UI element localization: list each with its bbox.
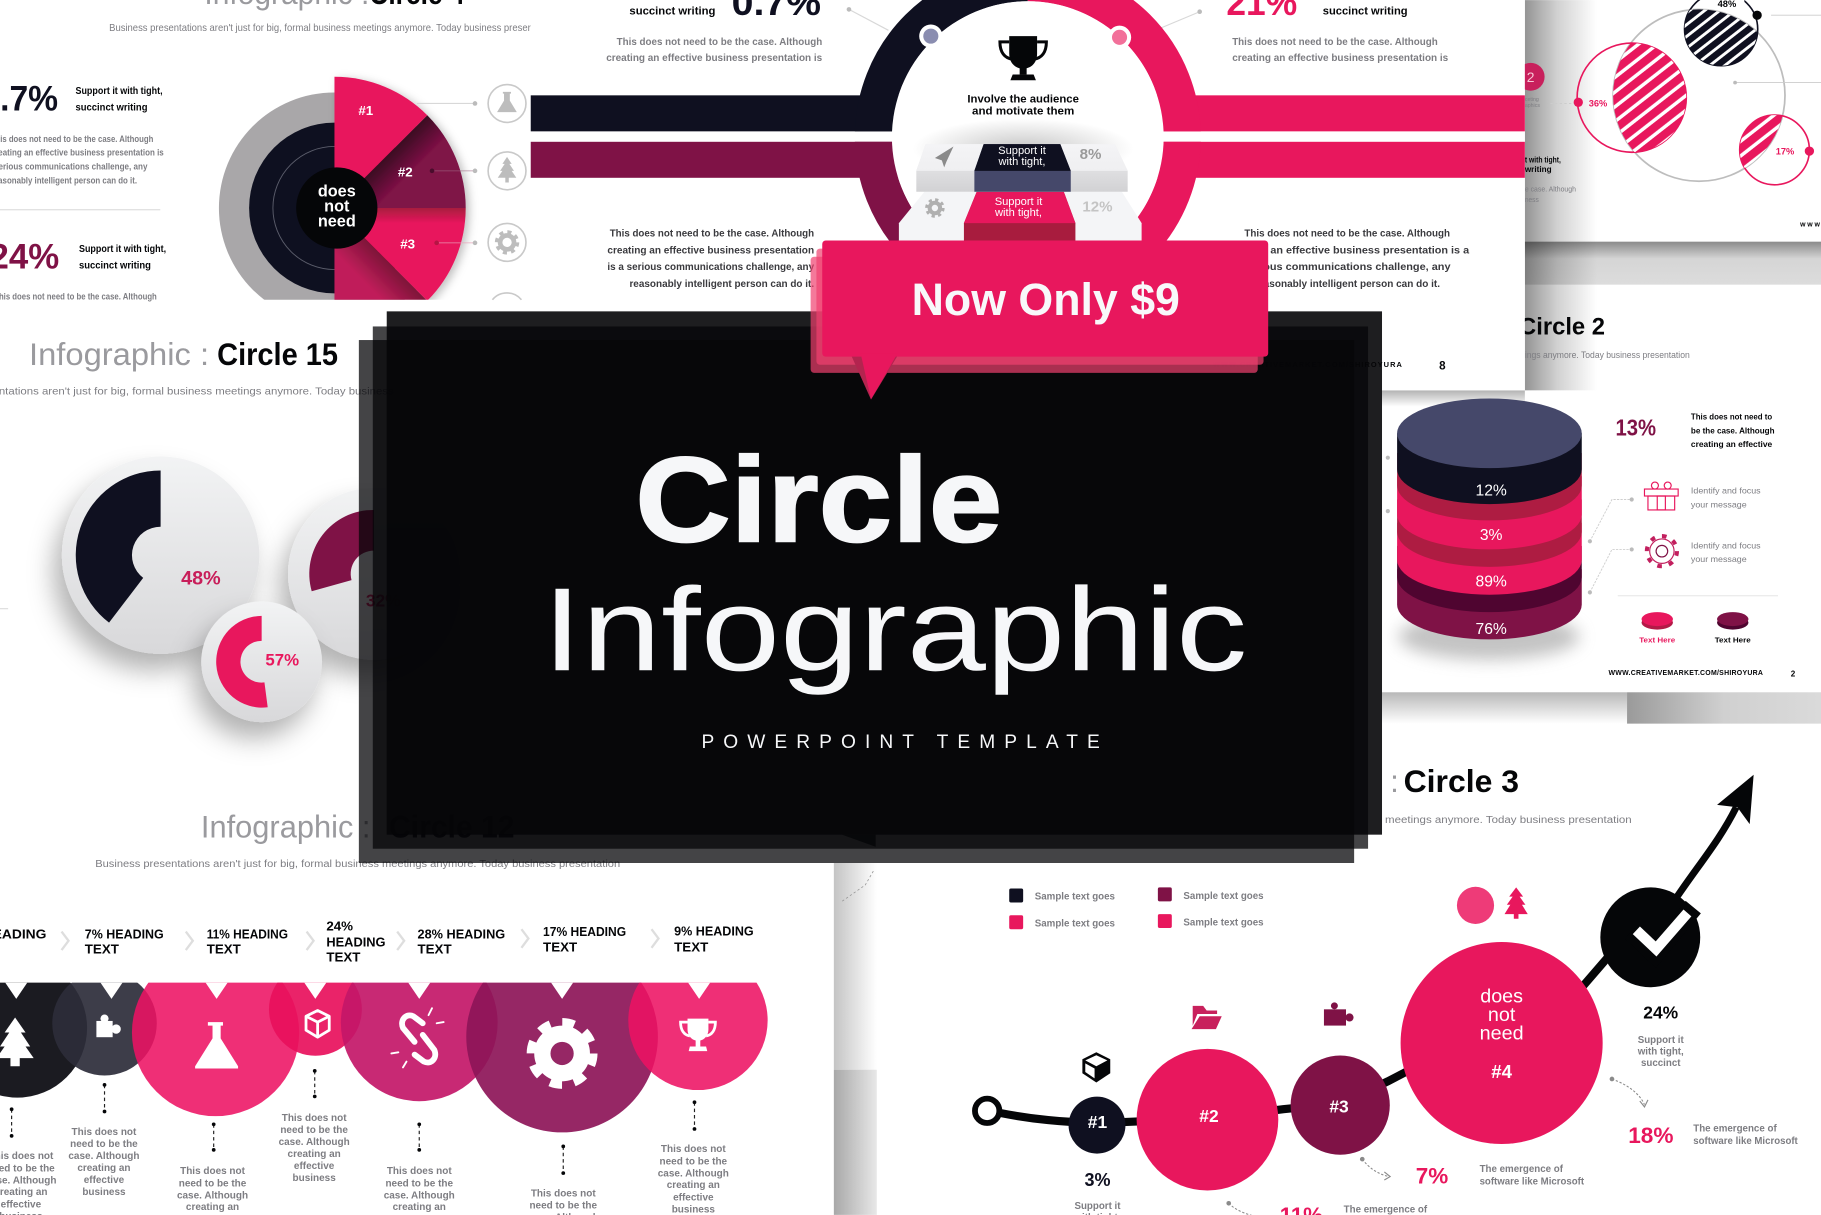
stat block 24% bbox=[0, 237, 166, 302]
sector #1 bbox=[333, 74, 433, 178]
column body text: need to be the bbox=[385, 1178, 453, 1189]
step 2 (lower): with tight, bbox=[994, 207, 1042, 219]
column body text: This does not bbox=[531, 1188, 596, 1199]
step 2 (lower): 12% bbox=[1082, 198, 1113, 215]
icon: gear bbox=[531, 1022, 593, 1085]
step 2 (lower) bbox=[899, 192, 1142, 242]
slide: Circle 4 (top left) bbox=[0, 0, 531, 302]
icon labels: Identify and focus bbox=[1691, 540, 1761, 550]
body text left: creating an effective business presentation bbox=[607, 245, 814, 256]
body text left: This does not need to be the case. Although bbox=[610, 228, 814, 239]
connector lines bbox=[1590, 499, 1632, 592]
icon: folder bbox=[1192, 1006, 1222, 1029]
dashed arrows bbox=[1229, 1079, 1644, 1215]
column body text: This does not bbox=[72, 1127, 137, 1138]
sector #4 bbox=[334, 238, 432, 300]
disc 57%: 57% bbox=[265, 651, 299, 670]
cylinder value labels bbox=[1476, 482, 1507, 638]
icon: flask bbox=[488, 85, 526, 122]
icon labels: your message bbox=[1691, 554, 1747, 564]
column body text: This does not bbox=[282, 1113, 347, 1124]
slide subtitle: Business presentations aren't just for big, formal business meetings anymore. Today business preser bbox=[109, 23, 531, 34]
slide title Circle 3: Circle 3 bbox=[1404, 764, 1519, 799]
column headings: TEXT bbox=[674, 939, 708, 954]
slide footer: 8 bbox=[1439, 359, 1446, 372]
slide footer bbox=[1608, 670, 1796, 679]
icon: plane bbox=[935, 146, 953, 167]
stat block 0.7% bbox=[0, 79, 164, 186]
centre label bbox=[296, 167, 377, 249]
node #4 bbox=[1401, 942, 1603, 1144]
left part: number badge and text bbox=[1517, 63, 1577, 204]
slide subtitle: ntations aren't just for big, formal business meetings anymore. Today business bbox=[0, 386, 394, 397]
column body text: creating an bbox=[77, 1163, 131, 1174]
large orbit ring bbox=[1613, 9, 1785, 181]
slide: Circle 5 (top right) bbox=[1517, 0, 1821, 229]
gray gap band below top-right slide bbox=[1525, 242, 1821, 285]
slide subtitle: Business presentations aren't just for big, formal business meetings anymore. Today business presentation bbox=[95, 859, 621, 870]
step 2 (lower): Support it bbox=[995, 196, 1043, 208]
overlapping circle row bbox=[0, 982, 768, 1132]
step 1 (upper): with tight, bbox=[997, 156, 1045, 168]
column headings: TEXT bbox=[418, 942, 452, 957]
icon: gear outline bbox=[1647, 536, 1677, 566]
column body text: effective bbox=[294, 1161, 335, 1172]
slide title Circle 12: Infographic : bbox=[201, 809, 370, 844]
disc 32%: 32% bbox=[366, 590, 401, 610]
body text right: reasonably intelligent person can do it. bbox=[1254, 279, 1440, 290]
stat block right: creating an effective business presentation is bbox=[1232, 53, 1449, 64]
column body text: need to be the bbox=[280, 1125, 348, 1136]
slide title Circle 12 bbox=[201, 809, 514, 844]
left part: number badge and text: ness bbox=[1525, 197, 1539, 204]
black title card layers bbox=[359, 311, 1382, 863]
cylinder value labels: 12% bbox=[1476, 482, 1507, 499]
column headings: 11% HEADING bbox=[207, 926, 288, 941]
slide: Circle 2 (right) bbox=[1382, 314, 1821, 724]
column body text: creating an bbox=[667, 1180, 720, 1191]
column body text: effective bbox=[84, 1175, 125, 1186]
icon: pink dot bbox=[1457, 887, 1494, 924]
stat 3%: Support it bbox=[1074, 1201, 1121, 1212]
column body text: business bbox=[293, 1173, 336, 1184]
disc 48%: 48% bbox=[181, 567, 221, 589]
main title: Circle: Circle bbox=[635, 432, 1002, 567]
body text left: is a serious communications challenge, any bbox=[607, 262, 814, 273]
stat 18%: 18% bbox=[1628, 1123, 1674, 1148]
legend: Sample text goes bbox=[1035, 892, 1116, 903]
column body text: creating an bbox=[186, 1202, 239, 1213]
icon: flask bbox=[195, 1022, 238, 1069]
band: plum bbox=[531, 142, 926, 178]
column headings: 24% bbox=[326, 918, 353, 933]
stat block 24%: Support it with tight, bbox=[79, 244, 166, 255]
column headings: TEXT bbox=[326, 950, 360, 965]
legend disc plum bbox=[1715, 612, 1751, 644]
stat 13%: creating an effective bbox=[1691, 439, 1772, 449]
hatched circle 17%: 17% bbox=[1776, 147, 1794, 157]
icon: tree bbox=[0, 1017, 34, 1066]
slide title Circle 3: : bbox=[1390, 764, 1399, 799]
icon: puzzle bbox=[1324, 1002, 1354, 1026]
slide: Circle 12 (bottom left) bbox=[0, 809, 768, 1215]
stat 7%: 7% bbox=[1416, 1164, 1449, 1189]
legend: Sample text goes bbox=[1183, 891, 1264, 902]
chevrons bbox=[62, 929, 658, 950]
node #2 bbox=[1137, 1049, 1278, 1190]
legend: Sample text goes bbox=[1183, 918, 1264, 929]
column headings: 17% HEADING bbox=[543, 924, 626, 939]
column body text: This does not bbox=[387, 1166, 452, 1177]
body text right: creating an effective business presentation is a bbox=[1225, 245, 1469, 256]
band: navy bbox=[531, 95, 926, 131]
stat 24%: 24% bbox=[1643, 1003, 1679, 1023]
cylinder value labels: 89% bbox=[1476, 574, 1507, 591]
node #1: #1 bbox=[1088, 1112, 1107, 1132]
stat block left: This does not need to be the case. Although bbox=[617, 37, 822, 48]
step 1 (upper) bbox=[916, 144, 1128, 192]
slide title Circle 12: Circle 12 bbox=[389, 809, 514, 844]
column body text: case. Although bbox=[384, 1191, 455, 1202]
cylinder side dots bbox=[1386, 456, 1390, 513]
slide footer: WWW.CREATIVEMARKET.COM/SHIROYURA bbox=[1213, 360, 1403, 369]
column body text: This does not bbox=[180, 1166, 246, 1177]
path start ring bbox=[975, 1099, 999, 1123]
stacked cylinder chart bbox=[1397, 398, 1582, 660]
radial sector chart: #2 bbox=[398, 165, 413, 180]
centre label: does bbox=[318, 182, 356, 200]
disc 57% bbox=[201, 601, 322, 722]
legend disc pink: Text Here bbox=[1639, 635, 1675, 644]
node #4: does bbox=[1480, 985, 1523, 1007]
radial sector chart bbox=[218, 74, 474, 300]
price text: Now Only $9 bbox=[912, 274, 1180, 325]
column headings: HEADING bbox=[326, 935, 386, 950]
icon: cube bbox=[1082, 1052, 1110, 1082]
callout back layers bbox=[811, 257, 1258, 373]
growth path line bbox=[999, 943, 1620, 1123]
slide footer: WWW.CREATIVEMARKET.COM/SHIROYURA bbox=[1608, 670, 1763, 677]
column headings: 28% HEADING bbox=[418, 926, 505, 941]
stat 7%: The emergence of bbox=[1480, 1164, 1564, 1175]
column body text: creating an bbox=[288, 1149, 341, 1160]
ring marker navy bbox=[919, 25, 942, 48]
left part: number badge and text: e case. Although bbox=[1525, 187, 1576, 194]
node #2: #2 bbox=[1199, 1106, 1219, 1126]
icon: tree bbox=[488, 152, 526, 190]
stat 3% bbox=[1073, 1170, 1121, 1215]
stat 7% bbox=[1416, 1164, 1585, 1189]
growth arrow bbox=[1672, 775, 1754, 904]
disc 48% bbox=[62, 457, 259, 654]
icon: broken link bbox=[391, 1008, 444, 1067]
slide title Circle 15: Circle 15 bbox=[217, 337, 338, 372]
column body text: effective bbox=[1, 1199, 42, 1210]
stat 18%: software like Microsoft bbox=[1693, 1136, 1799, 1147]
column body text: need to be the bbox=[660, 1156, 728, 1167]
column headings bbox=[0, 918, 754, 965]
icon: trophy bbox=[1000, 36, 1046, 80]
column headings: 7% HEADING bbox=[85, 926, 164, 941]
icon: tree bbox=[1505, 887, 1528, 919]
body text left: reasonably intelligent person can do it. bbox=[629, 279, 814, 290]
caption: and motivate them bbox=[972, 106, 1074, 118]
icon labels: your message bbox=[1691, 500, 1747, 510]
icon: cube bbox=[306, 1010, 329, 1037]
column body text: case. Although bbox=[68, 1151, 139, 1162]
connector lines bbox=[847, 7, 1202, 33]
cylinder value labels: 76% bbox=[1476, 621, 1507, 638]
stat block 24%: succinct writing bbox=[79, 260, 151, 271]
stat block right: succinct writing bbox=[1323, 6, 1408, 18]
column headings: TEXT bbox=[207, 942, 241, 957]
sector #2 bbox=[364, 115, 474, 214]
legend disc plum: Text Here bbox=[1715, 635, 1751, 644]
column headings: TEXT bbox=[543, 939, 577, 954]
connector lines bbox=[417, 101, 477, 245]
left part: number badge and text: ceting bbox=[1525, 97, 1539, 103]
price callout bbox=[811, 241, 1268, 400]
stat 24%: Support it bbox=[1638, 1035, 1684, 1046]
column body text: case. Although bbox=[658, 1169, 729, 1180]
node #3: #3 bbox=[1329, 1097, 1349, 1117]
subtitle: PowerPoint Template: POWERPOINT TEMPLATE bbox=[701, 732, 1100, 753]
band: pink lower bbox=[1130, 142, 1525, 178]
column body text: This does not bbox=[661, 1144, 726, 1155]
column body text: need to be the bbox=[529, 1200, 597, 1211]
icon: gear small bbox=[927, 200, 943, 216]
callout front bbox=[822, 241, 1268, 357]
left part: number badge and text: aphics bbox=[1525, 103, 1540, 109]
node #1 bbox=[1069, 1097, 1125, 1154]
check circle bbox=[1600, 887, 1700, 987]
icon: gift bbox=[1644, 482, 1678, 510]
disc 32% bbox=[288, 488, 460, 660]
icon: puzzle bbox=[96, 1015, 121, 1037]
body text left bbox=[607, 228, 814, 290]
column body text: case. Although bbox=[177, 1191, 248, 1202]
node #3 bbox=[1291, 1056, 1390, 1155]
stat 11% bbox=[1280, 1203, 1428, 1215]
legend: Sample text goes bbox=[1035, 918, 1116, 929]
hatched circle 48% bbox=[1685, 0, 1762, 66]
column headings: TEXT bbox=[85, 942, 119, 957]
slide subtitle: meetings anymore. Today business presentation bbox=[1385, 815, 1632, 826]
shadows below the slide bbox=[1382, 692, 1627, 724]
stat 24%: with tight, bbox=[1637, 1047, 1684, 1058]
left part: number badge and text: 2 bbox=[1527, 69, 1535, 85]
stat block left bbox=[606, 0, 823, 64]
step 1 (upper): Support it bbox=[998, 145, 1047, 157]
stat block right bbox=[1226, 0, 1449, 64]
main title: Infographic: Infographic bbox=[542, 564, 1247, 696]
slide shadows bottom left bbox=[834, 863, 877, 1215]
slide: Circle 15 (mid left) bbox=[0, 337, 460, 722]
stat 18%: The emergence of bbox=[1693, 1123, 1777, 1134]
step glow bbox=[913, 119, 1133, 179]
column body text bbox=[0, 1113, 729, 1215]
slide footer bbox=[1213, 359, 1446, 372]
stat block left: succinct writing bbox=[629, 6, 716, 18]
slide title Circle 4 bbox=[204, 0, 465, 11]
stat block left: creating an effective business presentation is bbox=[606, 53, 823, 64]
ring marker pink bbox=[1108, 26, 1131, 49]
slide footer: 2 bbox=[1791, 670, 1796, 679]
stat 24%: succinct bbox=[1641, 1058, 1681, 1069]
centre label: not bbox=[324, 197, 350, 215]
caption bbox=[967, 93, 1079, 118]
connector lines bbox=[1733, 15, 1821, 84]
column body text: need to be the bbox=[179, 1178, 247, 1189]
legend bbox=[1009, 887, 1264, 929]
centre label: need bbox=[318, 213, 356, 231]
stat 3%: 3% bbox=[1084, 1170, 1110, 1190]
node #4: #4 bbox=[1491, 1061, 1513, 1082]
slide: Circle 7 (top centre) bbox=[531, 0, 1525, 390]
stat block 0.7%: succinct writing bbox=[75, 102, 148, 113]
stat 24% bbox=[1637, 1003, 1684, 1069]
column body text: need to be the bbox=[70, 1139, 138, 1150]
slide subtitle: ings anymore. Today business presentation bbox=[1525, 350, 1690, 360]
stat 13% bbox=[1615, 411, 1775, 449]
legend disc pink bbox=[1639, 612, 1675, 644]
ring bbox=[873, 0, 1182, 292]
radial sector chart: #3 bbox=[400, 237, 415, 252]
column body text: business bbox=[82, 1187, 126, 1198]
caption: Involve the audience bbox=[967, 93, 1079, 105]
slide title Circle 15 bbox=[29, 337, 338, 372]
left part: number badge and text: writing bbox=[1524, 165, 1552, 174]
hatched circle 36% bbox=[1574, 43, 1686, 152]
stat block 0.7%: Support it with tight, bbox=[75, 86, 163, 97]
left part: number badge and text: t with tight, bbox=[1525, 156, 1561, 165]
column body text: creating an bbox=[393, 1202, 446, 1213]
node #4: need bbox=[1480, 1023, 1524, 1045]
stat 7%: software like Microsoft bbox=[1480, 1177, 1585, 1188]
step 1 (upper): 8% bbox=[1080, 146, 1102, 163]
body text right bbox=[1225, 228, 1469, 290]
radial sector chart: #1 bbox=[358, 103, 374, 118]
stat 13%: 13% bbox=[1615, 415, 1656, 441]
stat 13%: be the case. Although bbox=[1691, 425, 1775, 435]
centre slide side shadow bbox=[1525, 0, 1597, 390]
column body text: effective bbox=[673, 1192, 714, 1203]
icon labels: Identify and focus bbox=[1691, 486, 1761, 496]
node #4: not bbox=[1488, 1004, 1516, 1026]
dashed pointer lines bbox=[12, 1071, 694, 1173]
hatched circle 17% bbox=[1740, 115, 1814, 185]
band: pink upper bbox=[1130, 95, 1525, 131]
body text right: This does not need to be the case. Although bbox=[1244, 228, 1450, 239]
icon: gear bbox=[488, 223, 526, 261]
body text right: serious communications challenge, any bbox=[1244, 262, 1451, 273]
cylinder value labels: 3% bbox=[1480, 527, 1503, 544]
stat 13%: This does not need to bbox=[1691, 411, 1772, 421]
sector #3 bbox=[364, 206, 474, 300]
icon labels bbox=[1691, 486, 1761, 564]
hatched circle 36%: 36% bbox=[1589, 98, 1607, 108]
stat block right: This does not need to be the case. Although bbox=[1232, 37, 1438, 48]
slide title Circle 15: Infographic : bbox=[29, 337, 209, 372]
column headings: 9% HEADING bbox=[674, 924, 754, 939]
stat 18% bbox=[1628, 1123, 1799, 1148]
slide title Circle 2: Circle 2 bbox=[1519, 314, 1605, 341]
column body text: case. Although bbox=[279, 1137, 350, 1148]
slide: Circle 3 (bottom right) bbox=[975, 764, 1799, 1215]
centre slide bottom shadow bbox=[1382, 390, 1525, 407]
icon: trophy bbox=[681, 1019, 715, 1051]
